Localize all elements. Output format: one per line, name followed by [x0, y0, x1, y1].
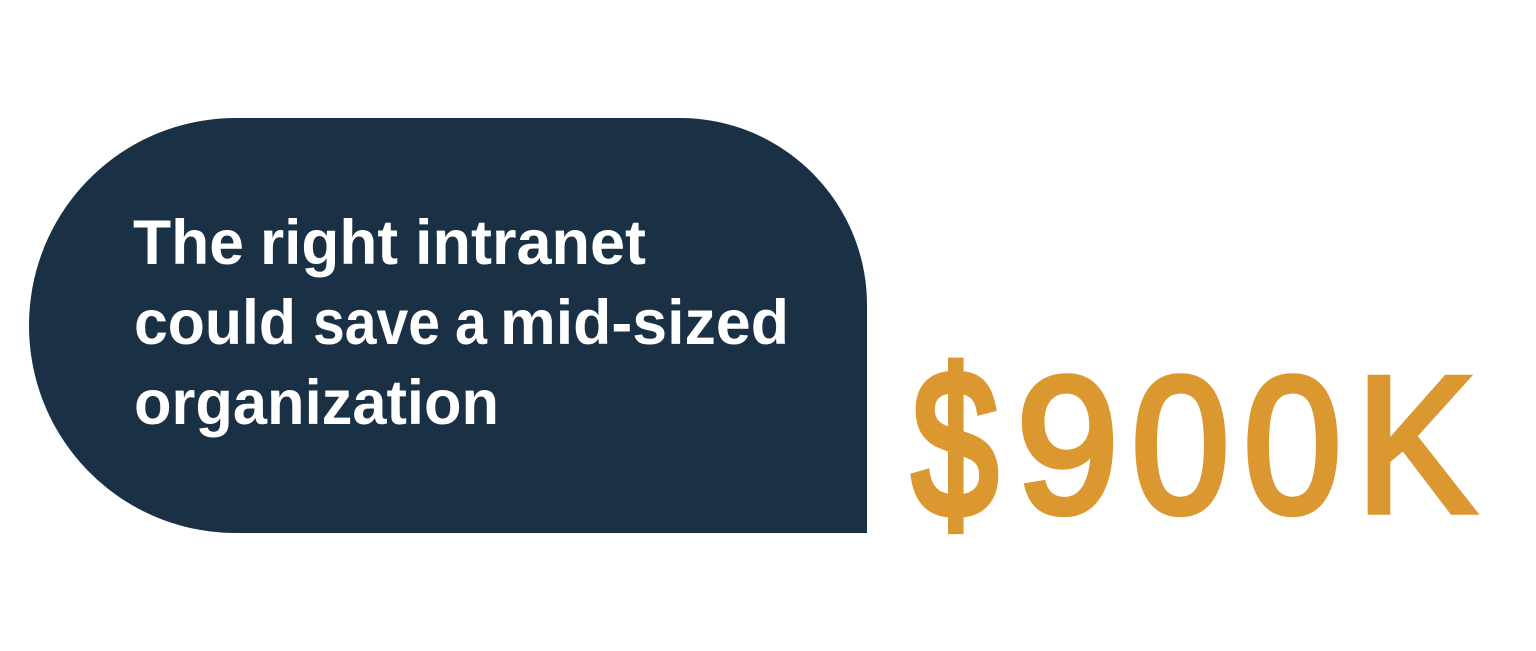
callout text: [133, 208, 789, 438]
big number: $900K: 0: [1131, 337, 1230, 554]
panel: callout shape: [29, 118, 867, 533]
callout text: mid-sized: [500, 288, 789, 358]
big number: $900K: [912, 328, 1475, 560]
callout text: could: [134, 288, 296, 358]
callout text: intranet: [415, 208, 646, 278]
callout text: organization: [134, 368, 499, 438]
big number: $900K: $: [912, 328, 998, 560]
big number: $900K: 9: [1016, 338, 1119, 554]
callout text: a: [455, 288, 488, 358]
big number: $900K: K: [1356, 336, 1475, 553]
callout text: save: [313, 288, 440, 358]
callout text: The: [133, 208, 244, 278]
big number: $900K: 0: [1243, 337, 1342, 554]
callout text: right: [260, 208, 398, 278]
